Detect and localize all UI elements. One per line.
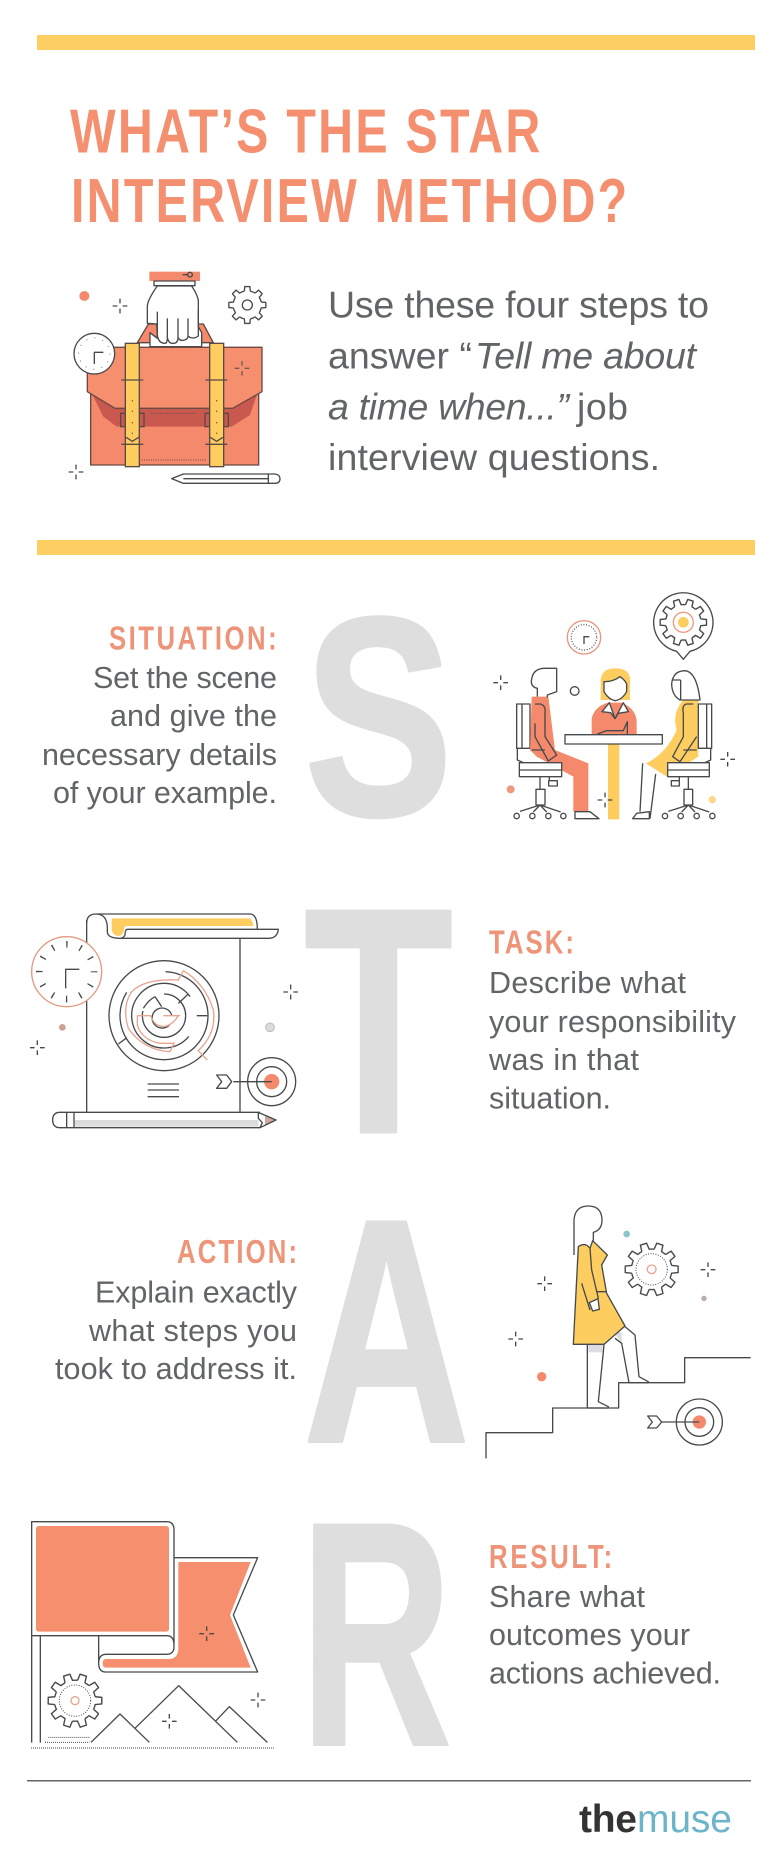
situation text: Set the scene	[93, 661, 277, 695]
title: INTERVIEW METHOD?	[71, 166, 627, 235]
action text: Explain exactly	[95, 1276, 298, 1310]
footer divider	[27, 1780, 751, 1782]
logo: the muse: the	[579, 1798, 637, 1841]
top yellow bar	[37, 35, 755, 50]
title: WHAT’S THE STAR	[70, 97, 540, 166]
situation text: SITUATION:	[109, 621, 277, 657]
situation text	[42, 621, 277, 810]
task text: your responsibility	[489, 1005, 737, 1039]
result text: RESULT:	[489, 1539, 612, 1576]
action text	[55, 1234, 298, 1386]
illustration: woman climbing stairs	[486, 1206, 751, 1458]
intro text: interview questions.	[328, 436, 660, 478]
action text: what steps you	[88, 1314, 297, 1348]
icon: hand holding briefcase	[69, 272, 280, 483]
intro text: Tell me about	[475, 334, 698, 376]
big letter T: T	[304, 842, 453, 1201]
big letter S: S	[304, 559, 453, 876]
big letter A: A	[303, 1152, 470, 1510]
big letter R: R	[300, 1456, 452, 1812]
logo: the muse	[579, 1798, 732, 1841]
task text: TASK:	[489, 925, 574, 961]
illustration: scroll with maze, clock, target	[30, 914, 298, 1128]
action text: took to address it.	[55, 1352, 297, 1386]
task text: situation.	[489, 1082, 611, 1116]
result text: outcomes your	[489, 1618, 690, 1652]
result text: actions achieved.	[489, 1656, 721, 1690]
situation text: and give the	[110, 699, 277, 733]
action text: ACTION:	[177, 1234, 297, 1271]
illustration: three people meeting at a table	[493, 593, 735, 819]
task text	[488, 925, 737, 1116]
task text: was in that	[488, 1043, 640, 1077]
intro text: a time when...”	[328, 386, 570, 428]
intro text	[328, 284, 709, 478]
second yellow bar	[37, 540, 755, 555]
intro text: Use these four steps to	[328, 284, 709, 326]
title	[70, 97, 627, 235]
intro text: job	[576, 386, 628, 428]
result text	[489, 1539, 721, 1690]
result text: Share what	[489, 1580, 646, 1614]
situation text: of your example.	[53, 776, 277, 810]
task text: Describe what	[489, 966, 687, 1000]
logo: the muse: muse	[637, 1798, 732, 1841]
illustration: flag over mountains	[31, 1522, 275, 1748]
intro text: answer “	[328, 334, 472, 376]
situation text: necessary details	[42, 738, 277, 772]
